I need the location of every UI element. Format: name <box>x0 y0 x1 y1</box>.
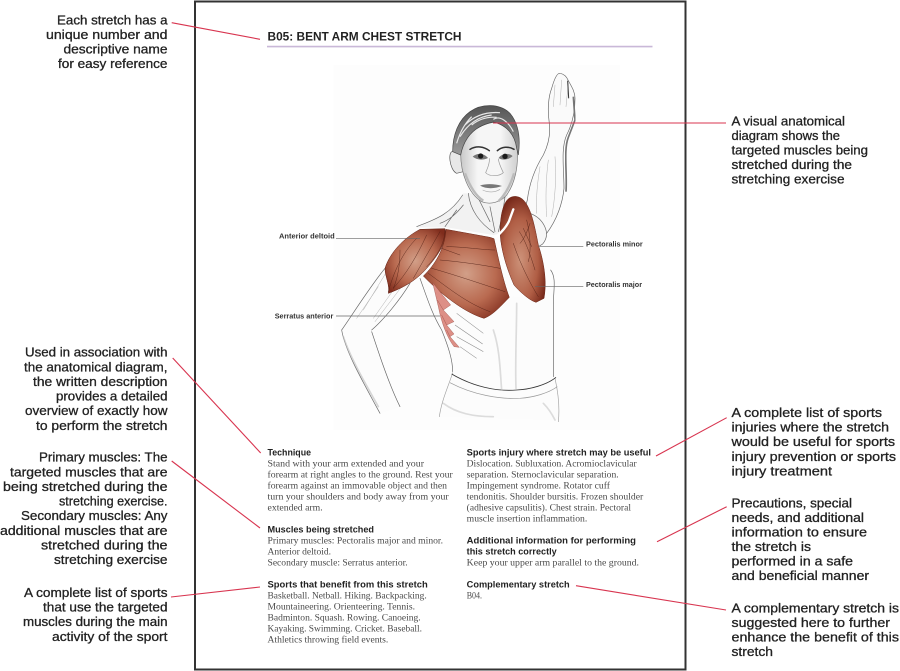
callout: precautions: Precautions, special <box>732 495 852 510</box>
callout: primary and secondary muscles: stretching exercise. <box>59 494 168 509</box>
callout: primary and secondary muscles: targeted muscles that are <box>10 464 168 479</box>
callout: anatomical diagram: A visual anatomical <box>732 113 845 128</box>
text block: technique: Technique <box>268 448 311 458</box>
icon: neck and shoulders <box>417 193 508 235</box>
callout arrow: title <box>172 23 260 39</box>
text block: sports injury: tendonitis. Shoulder bursitis. Frozen shoulder <box>467 492 643 502</box>
callout: complementary stretch: A complementary stretch is <box>732 600 899 615</box>
callout: anatomical diagram: diagram shows the <box>732 128 840 143</box>
text block: sports injury <box>467 448 651 524</box>
icon: rounded shoulder behind arm <box>530 213 546 247</box>
callout: stretch number and name: for easy reference <box>58 56 168 71</box>
callout: stretch number and name: unique number and <box>46 27 168 42</box>
text block: muscles being stretched: Primary muscles: Pectoralis major and minor. <box>268 536 443 546</box>
text block: technique: Stand with your arm extended and your <box>268 459 424 469</box>
text block: technique: forearm against an immovable object and then <box>268 481 448 491</box>
text block: sports that benefit <box>268 580 428 645</box>
muscle label: pectoralis major <box>535 280 642 289</box>
callout: list of sports <box>23 585 168 644</box>
callout: list of sports: muscles during the main <box>23 614 168 629</box>
text block: sports injury: Sports injury where stretch may be useful <box>467 448 651 458</box>
callout: precautions: the stretch is <box>732 539 811 554</box>
callout: precautions: and beneficial manner <box>732 568 870 583</box>
callout: anatomical diagram: stretched during the <box>732 157 852 172</box>
callout: primary and secondary muscles: Secondary muscles: Any <box>21 508 168 523</box>
callout: stretch number and name: descriptive name <box>64 42 168 56</box>
text block: sports that benefit: Athletics throwing field events. <box>268 635 388 645</box>
anatomical illustration <box>333 65 620 430</box>
text block: technique: turn your shoulders and body away from your <box>268 492 449 502</box>
muscle label: pectoralis minor: Pectoralis minor <box>586 240 643 249</box>
callout arrow: complementary <box>576 586 726 610</box>
callout: complementary stretch: enhance the benefit of this <box>732 630 899 644</box>
text block: complementary stretch: B04. <box>467 591 482 601</box>
muscle label: anterior deltoid: Anterior deltoid <box>279 232 335 241</box>
callout arrow: muscles <box>172 461 260 528</box>
text block: technique <box>268 448 453 513</box>
callout: list of sports: A complete list of sports <box>24 585 168 600</box>
text block: sports injury: Impingement syndrome. Rotator cuff <box>467 481 610 491</box>
callout: written description: the written description <box>33 374 168 389</box>
callout: written description: provides a detailed <box>56 389 168 404</box>
stretch title: B05: BENT ARM CHEST STRETCH <box>268 29 462 43</box>
callout: list of sports: activity of the sport <box>52 629 168 644</box>
text block: additional information: this stretch correctly <box>467 547 557 557</box>
callout: primary and secondary muscles: stretching exercise <box>54 552 168 567</box>
text block: muscles being stretched: Anterior deltoid. <box>268 547 331 557</box>
callout: list of sports: that use the targeted <box>43 600 168 615</box>
text block: sports injury: Dislocation. Subluxation. Acromioclavicular <box>467 459 637 469</box>
callout: sports injuries: injury treatment <box>732 464 832 478</box>
callout: written description: overview of exactly how <box>25 403 168 418</box>
muscle: pectoralis major and minor right <box>495 196 545 302</box>
page frame <box>195 2 686 670</box>
icon: raised arm and hand <box>520 73 575 233</box>
text block: complementary stretch <box>467 580 570 601</box>
callout: complementary stretch <box>732 600 899 659</box>
callout: anatomical diagram: targeted muscles being <box>732 142 868 158</box>
callout arrow: sports <box>171 587 260 597</box>
callout: precautions: performed in a safe <box>732 554 853 569</box>
text block: sports injury: muscle insertion inflammation. <box>467 514 587 524</box>
text block: sports that benefit: Mountaineering. Orienteering. Tennis. <box>268 602 415 612</box>
callout: anatomical diagram: stretching exercise <box>732 172 844 187</box>
text block: additional information: Additional information for performing <box>467 536 636 546</box>
callout: primary and secondary muscles: stretched during the <box>41 537 168 552</box>
icon: torso and arm outline <box>342 268 559 422</box>
callout: sports injuries: injury prevention or sports <box>732 449 896 464</box>
muscle label: pectoralis major: Pectoralis major <box>586 280 642 289</box>
muscle label: serratus anterior: Serratus anterior <box>275 311 333 320</box>
callout: precautions: needs, and additional <box>732 510 864 525</box>
callout: written description: the anatomical diagram, <box>24 359 168 374</box>
text block: muscles being stretched: Secondary muscle: Serratus anterior. <box>268 558 408 568</box>
callout arrow: technique <box>173 358 261 453</box>
callout: sports injuries <box>730 405 896 478</box>
text block: sports injury: (adhesive capsulitis). Chest strain. Pectoral <box>467 503 632 513</box>
callout: primary and secondary muscles: Primary muscles: The <box>39 450 168 465</box>
callout arrow: injuries <box>656 418 727 456</box>
text block: additional information <box>467 536 639 568</box>
muscle: anterior deltoid <box>385 229 446 293</box>
text block: muscles being stretched <box>268 525 443 568</box>
callout: complementary stretch: suggested here to further <box>732 615 891 630</box>
callout: sports injuries: injuries where the stretch <box>732 420 889 435</box>
callout: written description <box>24 345 168 433</box>
callout: primary and secondary muscles: additional muscles that are <box>0 523 168 538</box>
text block: complementary stretch: Complementary stretch <box>467 580 570 590</box>
icon: head and face <box>450 106 519 203</box>
text block: additional information: Keep your upper arm parallel to the ground. <box>467 558 639 568</box>
callout arrow: diagram <box>493 122 726 124</box>
callout: precautions: information to ensure <box>732 524 867 540</box>
callout: sports injuries: A complete list of sports <box>732 405 882 420</box>
text block: sports injury: separation. Sternoclavicular separation. <box>467 470 619 480</box>
callout: precautions <box>732 495 870 583</box>
text block: sports that benefit: Kayaking. Swimming. Cricket. Baseball. <box>268 624 422 634</box>
callout: anatomical diagram <box>732 113 868 187</box>
text block: sports that benefit: Sports that benefit from this stretch <box>268 580 428 590</box>
text block: technique: extended arm. <box>268 503 323 513</box>
callout: primary and secondary muscles: being stretched during the <box>3 479 168 494</box>
text block: sports that benefit: Badminton. Squash. Rowing. Canoeing. <box>268 613 421 623</box>
callout: primary and secondary muscles <box>0 450 168 567</box>
callout: stretch number and name: Each stretch has a <box>57 12 168 28</box>
callout: sports injuries: would be useful for sports <box>730 434 895 449</box>
callout arrow: additional information <box>657 507 727 542</box>
muscle label: pectoralis minor <box>538 240 643 249</box>
callout: stretch number and name <box>46 12 168 71</box>
callout: complementary stretch: stretch <box>732 644 773 659</box>
muscle: serratus anterior <box>433 283 459 347</box>
callout: written description: to perform the stretch <box>36 418 168 433</box>
text block: muscles being stretched: Muscles being stretched <box>268 525 374 535</box>
text block: technique: forearm at right angles to the ground. Rest your <box>268 470 453 480</box>
callout: written description: Used in association with <box>25 345 168 360</box>
muscle: pectoralis major left <box>423 229 509 318</box>
text block: sports that benefit: Basketball. Netball. Hiking. Backpacking. <box>268 591 427 601</box>
